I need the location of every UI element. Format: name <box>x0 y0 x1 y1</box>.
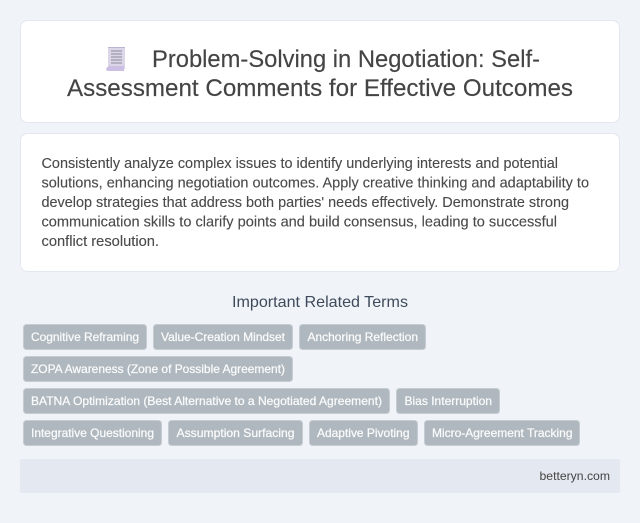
text block: summary <box>42 156 589 250</box>
text block: summary: communication skills to clarify points and build consensus, leading to successful <box>42 214 557 230</box>
tag: ZOPA Awareness <box>24 356 292 382</box>
panel: header card <box>20 20 620 122</box>
tag: Adaptive Pivoting: Adaptive Pivoting <box>317 426 410 440</box>
tag: BATNA Optimization: BATNA Optimization (Best Alternative to a Negotiated Agreement) <box>31 394 382 408</box>
tag: Anchoring Reflection: Anchoring Reflection <box>308 330 418 344</box>
text block: summary: solutions, enhancing negotiation outcomes. Apply creative thinking and adaptability to <box>42 176 589 192</box>
tag: Micro-Agreement Tracking: Micro-Agreement Tracking <box>432 426 572 440</box>
tag: Bias Interruption <box>396 388 500 414</box>
tag: Value-Creation Mindset <box>154 324 292 350</box>
panel: summary card <box>20 134 620 272</box>
tag: ZOPA Awareness: ZOPA Awareness (Zone of Possible Agreement) <box>31 362 285 376</box>
text block: summary: conflict resolution. <box>42 234 159 250</box>
title <box>67 46 573 102</box>
text block: summary: develop strategies that address both parties' needs effectively. Demonstrate strong <box>42 195 569 211</box>
tag: Value-Creation Mindset: Value-Creation Mindset <box>161 330 286 344</box>
title: Problem-Solving in Negotiation: Self- <box>152 46 540 73</box>
tag: Assumption Surfacing: Assumption Surfacing <box>176 426 294 440</box>
heading: important related terms: Important Related Terms <box>232 294 408 311</box>
icon: document scroll <box>106 47 125 71</box>
tag: Adaptive Pivoting <box>310 420 418 446</box>
tag: Cognitive Reframing: Cognitive Reframing <box>31 330 139 344</box>
tag: Assumption Surfacing <box>168 420 302 446</box>
tag: BATNA Optimization <box>24 388 390 414</box>
tag: Bias Interruption: Bias Interruption <box>404 394 492 408</box>
tag: Micro-Agreement Tracking <box>424 420 580 446</box>
tag: Integrative Questioning <box>24 420 162 446</box>
title: Assessment Comments for Effective Outcomes <box>67 75 573 102</box>
footer bar <box>20 459 620 493</box>
tag: Integrative Questioning: Integrative Questioning <box>31 426 154 440</box>
text block: summary: Consistently analyze complex issues to identify underlying interests and potential <box>42 156 558 172</box>
tag: Anchoring Reflection <box>300 324 426 350</box>
tag: Cognitive Reframing <box>24 324 146 350</box>
tag group: related terms <box>24 324 580 446</box>
footer source: betteryn.com <box>540 469 610 483</box>
